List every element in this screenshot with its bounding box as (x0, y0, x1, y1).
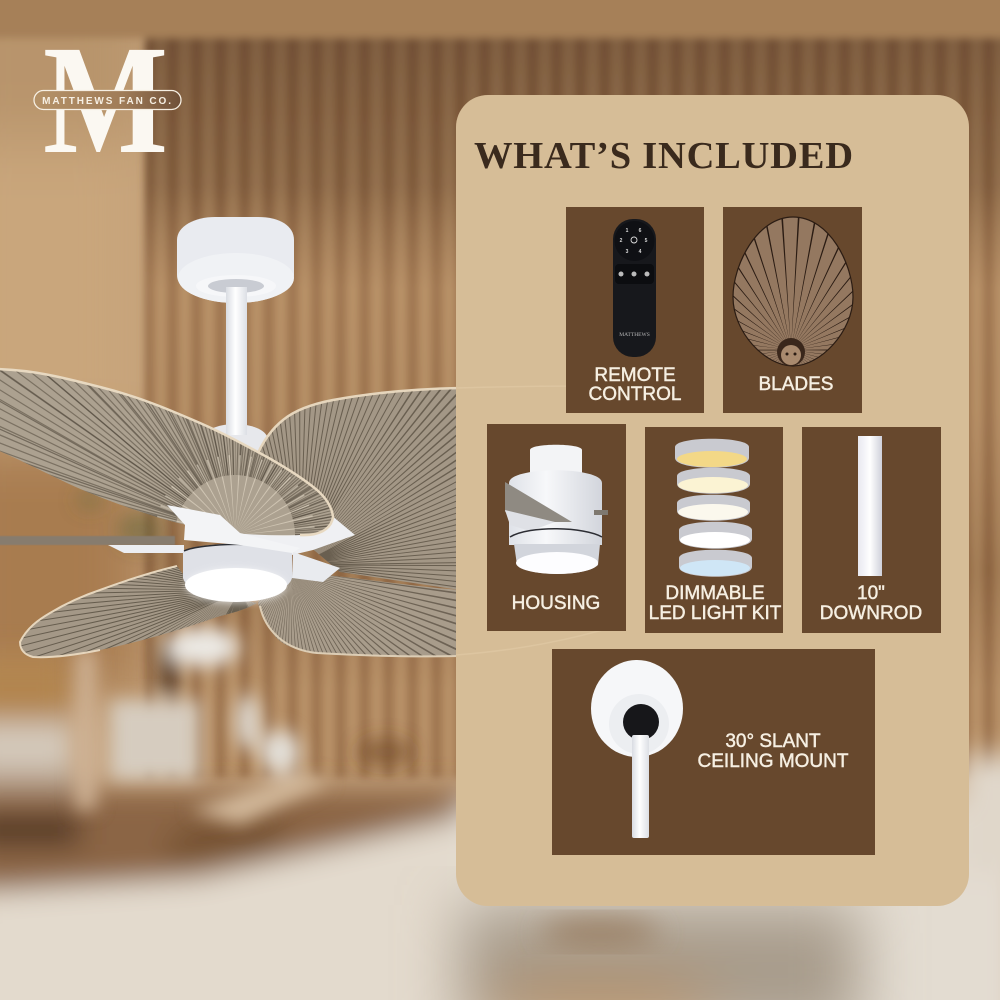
thin side blade (0, 536, 175, 545)
motor housing and light (183, 544, 292, 603)
card: remote control: CONTROL (589, 384, 681, 405)
card: ceiling mount (552, 649, 875, 855)
card: housing (487, 424, 626, 631)
icon: motor housing (505, 445, 608, 574)
icon: LED disc, daylight (679, 550, 752, 577)
icon: remote: MATTHEWS (619, 332, 650, 338)
panel: what's included (456, 95, 969, 906)
bracket: left (108, 545, 184, 553)
card: downrod: DOWNROD (820, 603, 922, 624)
bracket: lower right (292, 552, 340, 582)
card: downrod (802, 427, 941, 633)
heading: WHAT’S INCLUDED (474, 135, 853, 177)
blade: upper left (0, 370, 332, 536)
ceiling fan (0, 217, 465, 725)
fan downrod (226, 287, 247, 435)
logo: Matthews Fan Co.: M (43, 13, 168, 186)
card: dimmable LED light kit (645, 427, 783, 633)
icon: remote (613, 219, 656, 357)
card: ceiling mount: CEILING MOUNT (698, 751, 849, 772)
icon: LED disc, neutral (677, 495, 750, 521)
icon: LED disc, warm (675, 439, 749, 468)
card: dimmable LED light kit: DIMMABLE (665, 583, 765, 604)
card: dimmable LED light kit: LED LIGHT KIT (649, 603, 782, 624)
icon: remote: 3 (626, 249, 629, 255)
card: housing: HOUSING (512, 593, 600, 614)
card: blades (723, 207, 862, 413)
blade: upper right (260, 389, 456, 590)
icon: downrod (858, 436, 882, 576)
card: ceiling mount: 30° SLANT (725, 731, 821, 752)
icon: remote: 4 (639, 249, 642, 255)
icon: LED disc, soft (677, 468, 750, 494)
icon: remote: 6 (639, 228, 642, 234)
fan downrod coupler (202, 424, 268, 456)
fan canopy (177, 217, 294, 303)
icon: slant mount (591, 660, 683, 838)
bracket: upper left (167, 505, 300, 553)
blade: lower right (258, 572, 456, 656)
card: remote control (566, 207, 704, 413)
card: blades: BLADES (759, 374, 833, 395)
icon: remote: 5 (645, 238, 648, 244)
card: remote control: REMOTE (594, 365, 676, 386)
icon: palm blade (732, 216, 854, 367)
blade: lower left (21, 566, 257, 656)
icon: LED disc, cool (679, 522, 752, 549)
bracket: right (240, 510, 355, 555)
icon: remote: 2 (620, 238, 623, 244)
icon: remote: 1 (626, 228, 629, 234)
card: downrod: 10" (857, 583, 885, 604)
logo: Matthews Fan Co.: MATTHEWS FAN CO. (42, 96, 173, 107)
